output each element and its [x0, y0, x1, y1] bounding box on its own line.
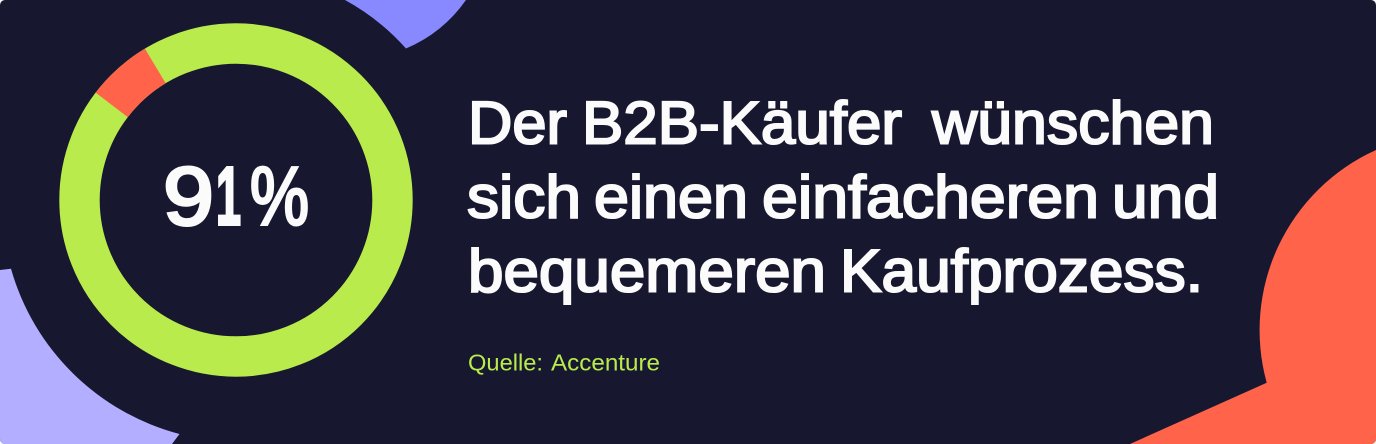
headline: einen — [594, 163, 748, 231]
headline: Kaufprozess. — [840, 237, 1203, 305]
source note — [468, 350, 660, 376]
headline: sich — [467, 163, 581, 231]
headline: B2B-Käufer — [582, 89, 902, 157]
source note: Quelle: — [468, 350, 543, 376]
headline: einfacheren — [762, 163, 1099, 231]
donut segment: remainder — [112, 66, 155, 105]
donut value: % — [250, 150, 309, 242]
decorative shape: purple top — [345, 0, 466, 48]
donut value: 1 — [216, 150, 241, 242]
donut value: 9 — [163, 150, 214, 242]
donut value — [163, 150, 309, 242]
headline: bequemeren — [468, 237, 826, 305]
decorative shape: lilac bottom left — [0, 269, 180, 444]
source note: Accenture — [551, 350, 660, 376]
decorative shape: coral right — [1130, 150, 1376, 444]
headline — [467, 89, 1219, 305]
headline: und — [1112, 163, 1219, 231]
headline: Der — [468, 89, 567, 157]
donut chart: 91% — [80, 44, 392, 356]
headline: wünschen — [931, 89, 1214, 157]
donut segment: 91% — [80, 44, 392, 356]
